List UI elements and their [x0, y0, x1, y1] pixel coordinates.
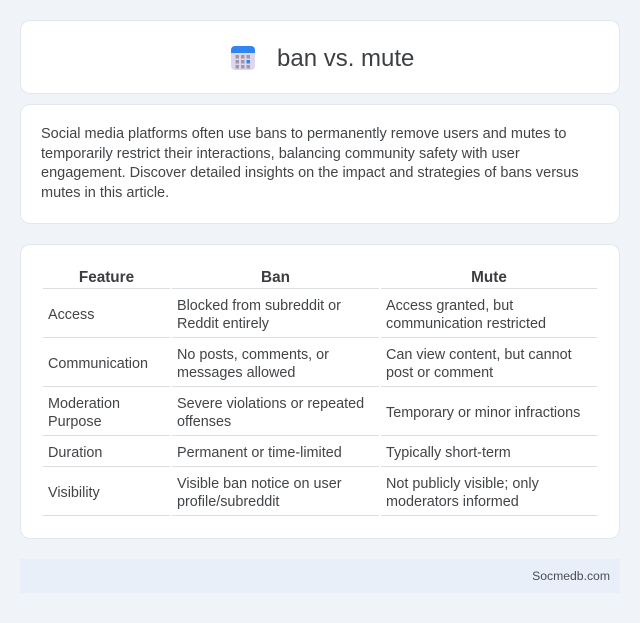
- intro text: engagement. Discover detailed insights on the impact and strategies of bans versus: [41, 165, 579, 181]
- panel: title card: [20, 20, 620, 94]
- row: Visibility: Not publicly visible; only: [386, 476, 539, 492]
- row: Access: Blocked from subreddit or: [177, 298, 341, 314]
- row: Visibility: Visible ban notice on user: [177, 476, 342, 492]
- panel: comparison table: [20, 244, 620, 539]
- intro text: mutes in this article.: [41, 184, 169, 200]
- row: Duration: Duration: [48, 445, 102, 461]
- table header: Feature: Feature: [79, 269, 134, 286]
- row: Visibility: [48, 476, 539, 510]
- row: Visibility: profile/subreddit: [177, 494, 279, 510]
- title: ban vs. mute: [277, 45, 414, 72]
- intro text: temporarily restrict their interactions, balancing community safety with user: [41, 146, 520, 162]
- panel: introduction: [20, 104, 620, 224]
- intro text: Social media platforms often use bans to permanently remove users and mutes to: [41, 126, 566, 142]
- row: Visibility: moderators informed: [386, 494, 519, 510]
- table header: Mute: Mute: [471, 269, 507, 286]
- row: Moderation Purpose: offenses: [177, 414, 231, 430]
- row: Moderation Purpose: Moderation: [48, 396, 120, 412]
- row: Communication: Can view content, but cannot: [386, 347, 572, 363]
- row: Duration: Typically short-term: [386, 445, 511, 461]
- row: Moderation Purpose: [48, 396, 580, 430]
- icon: calendar: [231, 46, 255, 70]
- row: Duration: Permanent or time-limited: [177, 445, 342, 461]
- row: Access: [48, 298, 546, 332]
- row: Access: Access granted, but: [386, 298, 513, 314]
- row: Communication: No posts, comments, or: [177, 347, 329, 363]
- row: Access: Access: [48, 307, 94, 323]
- row: Duration: [48, 445, 511, 461]
- footer bar: [20, 559, 620, 593]
- row: Moderation Purpose: Temporary or minor infractions: [386, 405, 580, 421]
- row: Communication: Communication: [48, 356, 148, 372]
- intro text: [41, 126, 579, 200]
- row: Visibility: Visibility: [48, 485, 100, 501]
- row: Moderation Purpose: Purpose: [48, 414, 102, 430]
- row: Access: Reddit entirely: [177, 316, 269, 332]
- footer text: Socmedb.com: Socmedb.com: [532, 569, 610, 583]
- row: Access: communication restricted: [386, 316, 546, 332]
- row: Communication: [48, 347, 572, 381]
- row: Moderation Purpose: Severe violations or repeated: [177, 396, 364, 412]
- table header: Ban: Ban: [261, 269, 290, 286]
- row: Communication: messages allowed: [177, 365, 295, 381]
- row: Communication: post or comment: [386, 365, 493, 381]
